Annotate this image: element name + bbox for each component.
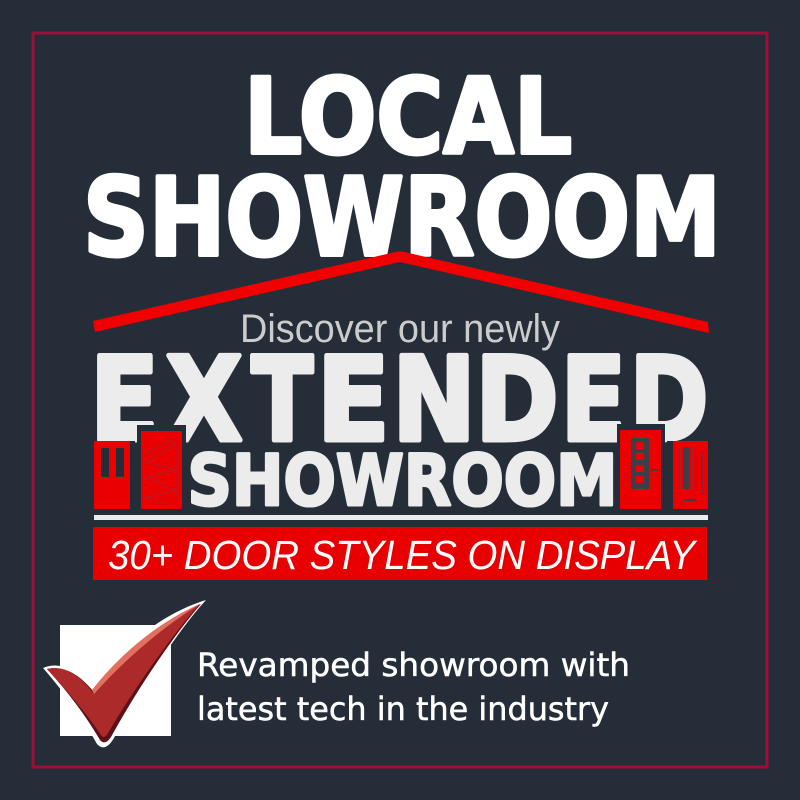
showroom heading: SHOWROOM [188, 440, 618, 522]
extended heading: D [475, 333, 559, 468]
extended heading: D [630, 333, 708, 468]
roof line [93, 251, 709, 333]
caption [197, 646, 630, 728]
title [83, 56, 721, 281]
extended heading: T [252, 333, 313, 468]
icon: door with glass pattern [141, 431, 182, 509]
title: LOCAL [244, 56, 572, 178]
red banner: 30+ DOOR STYLES ON DISPLAY [108, 532, 697, 578]
checkbox with check mark [43, 600, 206, 747]
icon: door with long side panel [673, 441, 708, 509]
divider bar [94, 515, 708, 520]
icon: door with four square lights [620, 430, 661, 509]
extended heading: E [317, 333, 390, 468]
extended heading: E [561, 333, 626, 468]
caption: Revamped showroom with [197, 646, 630, 684]
extended heading: X [166, 333, 242, 468]
extended heading: N [392, 333, 476, 468]
subheading: Discover our newly [240, 307, 560, 351]
extended heading: E [90, 333, 159, 468]
icon: door with two windows [94, 441, 130, 509]
door cut-out backing [89, 424, 713, 514]
extended heading [90, 333, 708, 468]
caption: latest tech in the industry [197, 690, 609, 728]
